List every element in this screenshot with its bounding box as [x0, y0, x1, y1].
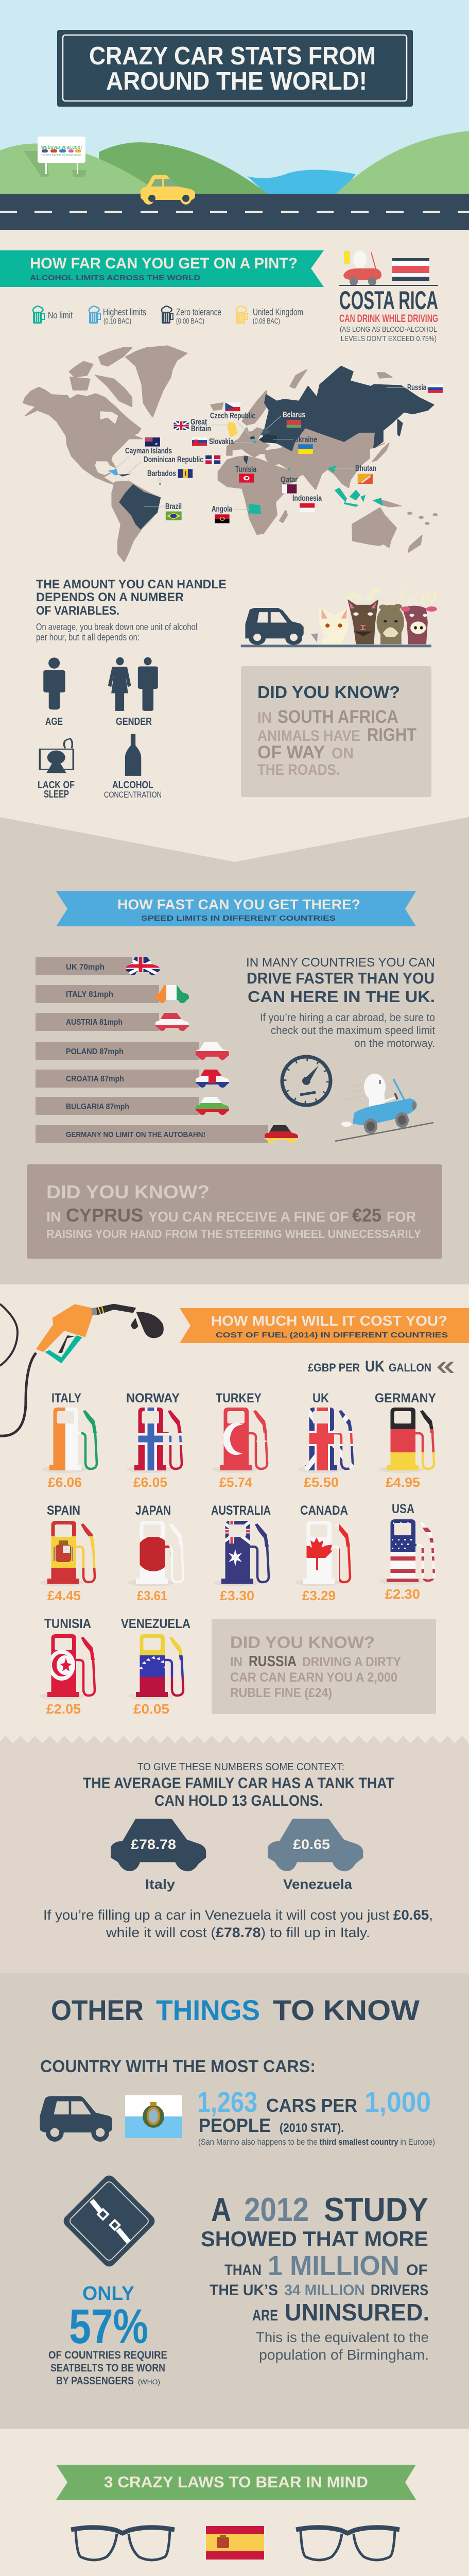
pump: Spain: £4.45 [47, 1588, 81, 1603]
car: Venezuela full tank price [268, 1819, 363, 1892]
legend: beer mugs [33, 306, 303, 326]
labels: variables: CONCENTRATION [104, 790, 162, 800]
did you know: Russia: DRIVING A DIRTY [302, 1655, 401, 1669]
background: sky [0, 0, 469, 196]
icon: dark car [40, 2096, 112, 2142]
did you know: Cyprus: CYPRUS [66, 1205, 143, 1226]
text: drive faster than you can in the UK: on the motorway. [354, 1038, 435, 1049]
pump: USA: £2.30 [385, 1586, 420, 1602]
title sign: AROUND THE WORLD! [106, 67, 367, 95]
speed bar: Austria: AUSTRIA 81mph [66, 1018, 123, 1027]
labels: variables: ALCOHOL [112, 779, 153, 791]
pump: Japan: JAPAN [135, 1503, 171, 1518]
map country labels: Ukraine [294, 435, 317, 444]
pump: Venezuela: £0.05 [133, 1701, 169, 1717]
text: drive faster than you can in the UK: IN MANY COUNTRIES YOU CAN [246, 956, 435, 970]
text: unit of alcohol per hour: On average, you break down one unit of alcohol [36, 622, 197, 632]
stat: 57 percent seatbelts: SEATBELTS TO BE WORN [50, 2362, 165, 2374]
heading: the amount you can handle [36, 578, 227, 618]
did you know: Cyprus: DID YOU KNOW? [46, 1181, 210, 1202]
pump: Turkey: £5.74 [219, 1475, 253, 1490]
stat: 57 percent seatbelts: (WHO) [138, 2378, 160, 2386]
text: drive faster than you can in the UK [246, 956, 435, 1049]
map country labels: Qatar [281, 476, 298, 484]
pump: Canada: CANADA [300, 1503, 348, 1518]
legend: beer mugs: (0.08 BAC) [253, 317, 280, 326]
callout: Costa Rica [339, 286, 438, 343]
speed bar: Croatia: CROATIA 87mph [66, 1075, 124, 1083]
stat: 2012 uninsured drivers study: A [211, 2191, 231, 2228]
map country labels: Angola [212, 505, 232, 514]
did you know: Russia [212, 1619, 436, 1714]
map country labels: Britain [191, 425, 211, 433]
icon: seatbelt sign [61, 2173, 157, 2269]
did you know: South Africa: DID YOU KNOW? [257, 683, 400, 702]
stat: 2012 uninsured drivers study: DRIVERS [371, 2282, 428, 2299]
pump: UK [298, 1391, 356, 1490]
illustration: driver in red car with beer [339, 250, 438, 286]
map country labels: Bhutan [355, 464, 376, 473]
heading: other things to know [51, 1994, 420, 2026]
stat: 2012 uninsured drivers study: 2012 [244, 2191, 309, 2228]
pump: Italy: £6.06 [48, 1475, 82, 1490]
labels: variables: GENDER [116, 716, 152, 727]
did you know: South Africa: IN [257, 709, 272, 726]
icon: yellow car on road [141, 175, 195, 205]
flag: San Marino [125, 2095, 182, 2138]
did you know: South Africa: THE ROADS. [257, 761, 340, 778]
pump: Australia: £3.30 [220, 1588, 254, 1603]
stat: 57 percent seatbelts: BY PASSENGERS [56, 2375, 134, 2387]
stat: 2012 uninsured drivers study: OF [406, 2262, 428, 2279]
did you know: Cyprus: FOR [387, 1209, 416, 1225]
heading: tank context: CAN HOLD 13 GALLONS. [154, 1792, 323, 1809]
text: filling up comparison [43, 1907, 433, 1940]
heading ribbon: 3 crazy laws [56, 2465, 416, 2500]
stat: 2012 uninsured drivers study: This is the equivalent to the [256, 2329, 429, 2345]
stat: cars per 1000 people: 1,000 [364, 2086, 431, 2118]
map country labels: Brazil [165, 502, 182, 511]
stat: 2012 uninsured drivers study: THAN [224, 2262, 262, 2279]
did you know: Cyprus [27, 1164, 442, 1259]
pump: Australia: AUSTRALIA [211, 1503, 271, 1518]
pump: Tunisia: TUNISIA [44, 1617, 91, 1631]
legend: beer mugs: (0.00 BAC) [176, 317, 204, 326]
pump: Norway: NORWAY [126, 1391, 180, 1405]
legend: beer mugs: Highest limits [103, 307, 146, 317]
background: tank context section with zigzag edge [0, 1736, 469, 1974]
heading: tank context [83, 1761, 394, 1809]
pump: Canada [295, 1503, 353, 1603]
landscape hills and water [0, 131, 469, 195]
did you know: Russia: DID YOU KNOW? [230, 1633, 375, 1652]
stat: cars per 1000 people: 1,263 [197, 2086, 257, 2118]
map country labels [125, 383, 426, 514]
background: fuel section [0, 1284, 469, 1748]
background: beige alcohol section [0, 230, 469, 863]
billboard: webuyanycar.com: The UK's favourite car buying service [41, 154, 82, 156]
heading: other things to know: THINGS [156, 1994, 260, 2026]
heading ribbon: how much will it cost [180, 1308, 469, 1343]
speed bar: UK [36, 957, 160, 976]
unit label: GBP per UK gallon: £GBP PER [308, 1361, 360, 1374]
heading: the amount you can handle: DEPENDS ON A NUMBER [36, 590, 184, 604]
heading: other things to know: OTHER [51, 1994, 144, 2026]
background: crazy laws section [0, 2429, 469, 2576]
speed bar: UK: UK 70mph [66, 963, 105, 972]
stat: 2012 uninsured drivers study: 34 MILLION [284, 2282, 365, 2299]
pump: Spain: SPAIN [47, 1503, 80, 1518]
callout: Costa Rica: (AS LONG AS BLOOD-ALCOHOL [340, 325, 437, 334]
labels: variables: AGE [45, 716, 63, 727]
pump: Turkey [212, 1391, 270, 1490]
speed bar: Bulgaria [36, 1097, 229, 1115]
icon: speedometer [277, 1052, 335, 1110]
did you know: Russia: CAR CAN EARN YOU A 2,000 [230, 1670, 397, 1685]
did you know: Russia: IN [230, 1655, 242, 1669]
heading ribbon: how much will it cost: COST OF FUEL (2014) IN DIFFERENT COUNTRIES [216, 1331, 448, 1340]
heading: tank context: THE AVERAGE FAMILY CAR HAS A TANK THAT [83, 1775, 394, 1792]
legend: beer mugs: No limit [48, 310, 73, 320]
stat: 57 percent seatbelts: OF COUNTRIES REQUIRE [48, 2349, 167, 2361]
text: drive faster than you can in the UK: If you’re hiring a car abroad, be sure to [260, 1012, 435, 1024]
pump: Italy: ITALY [51, 1391, 81, 1405]
stat: 57 percent seatbelts [48, 2283, 167, 2387]
did you know: Cyprus: €25 [352, 1205, 381, 1226]
billboard: webuyanycar.com [24, 137, 86, 177]
speed bar: Austria [36, 1013, 189, 1031]
stat: cars per 1000 people: PEOPLE [199, 2115, 271, 2136]
map country labels: Russia [407, 383, 426, 392]
stat: cars per 1000 people: CARS PER [266, 2095, 357, 2116]
stat: cars per 1000 people: (San Marino also happens to be the third smallest country in Europe) [198, 2137, 435, 2147]
did you know: Cyprus: RAISING YOUR HAND FROM THE STEERING WHEEL UNNECESSARILY [46, 1227, 421, 1241]
unit label: GBP per UK gallon: UK [365, 1357, 385, 1375]
labels: variables: SLEEP [44, 789, 69, 800]
heading banner: how far can you get on a pint: ALCOHOL LIMITS ACROSS THE WORLD [30, 274, 200, 282]
pump: Italy [42, 1391, 100, 1490]
did you know: South Africa: OF WAY [257, 742, 325, 762]
unit label: GBP per UK gallon [308, 1357, 454, 1375]
speed bar: Bulgaria: BULGARIA 87mph [66, 1103, 129, 1111]
legend: beer mugs: United Kingdom [253, 307, 303, 317]
heading banner: how far can you get on a pint: HOW FAR CAN YOU GET ON A PINT? [30, 255, 298, 272]
heading ribbon: how fast can you get there: HOW FAST CAN YOU GET THERE? [117, 896, 360, 912]
text: filling up comparison: while it will cost ( £78.78) to fill up in Italy. [106, 1925, 370, 1940]
heading: other things to know: TO KNOW [273, 1994, 420, 2026]
speed bar: Poland: POLAND 87mph [66, 1047, 124, 1056]
speed bar: Poland [36, 1042, 229, 1060]
stat: 2012 uninsured drivers study: STUDY [324, 2191, 428, 2228]
speed bar: Germany: GERMANY NO LIMIT ON THE AUTOBAHN! [66, 1130, 205, 1139]
map country labels: Slovakia [209, 437, 234, 446]
pump: Norway: £6.05 [133, 1475, 167, 1490]
heading banner: how far can you get on a pint [0, 250, 324, 287]
car: Italy full tank price: Italy [145, 1876, 176, 1892]
pump: Canada: £3.29 [302, 1588, 336, 1603]
stat: 2012 uninsured drivers study: SHOWED THAT MORE [201, 2227, 428, 2251]
did you know: South Africa [241, 666, 431, 797]
flag: Spain [206, 2526, 264, 2560]
title sign [57, 30, 413, 107]
map country labels: Dominican Republic [144, 455, 203, 464]
pump: Japan [128, 1503, 186, 1603]
stat: 57 percent seatbelts: 57% [69, 2299, 148, 2354]
labels: variables: LACK OF [38, 779, 75, 791]
map country labels: Barbados [147, 469, 176, 478]
car: Italy full tank price: £78.78 [131, 1837, 176, 1852]
illustration: driver in blue car on slope [335, 1074, 433, 1141]
legend: beer mugs: Zero tolerance [176, 307, 221, 317]
road [0, 194, 469, 230]
icon: glasses right [296, 2528, 399, 2560]
pump: Norway [126, 1391, 185, 1490]
map country labels: Indonesia [292, 494, 322, 503]
title sign: CRAZY CAR STATS FROM [89, 42, 376, 70]
text: unit of alcohol per hour: per hour, but it all depends on: [36, 632, 140, 642]
heading ribbon: how fast can you get there: SPEED LIMITS IN DIFFERENT COUNTRIES [141, 914, 336, 923]
stat: 2012 uninsured drivers study: population of Birmingham. [259, 2347, 429, 2363]
did you know: South Africa: ON [332, 745, 354, 762]
pump: Venezuela: VENEZUELA [121, 1617, 190, 1631]
map country labels: Great [190, 418, 207, 427]
callout: Costa Rica: LEVELS DON’T EXCEED 0.75%) [341, 334, 437, 343]
speed bar: Italy [36, 985, 189, 1004]
icon: fuel nozzle and hose [0, 1304, 164, 1436]
pump: Spain [40, 1503, 98, 1603]
legend: beer mugs: (0.10 BAC) [103, 317, 131, 326]
map flags [145, 384, 443, 523]
map country labels: Czech Republic [210, 412, 255, 420]
heading ribbon: how fast can you get there [56, 891, 416, 926]
speed bar: Italy: ITALY 81mph [66, 990, 113, 999]
heading ribbon: 3 crazy laws: 3 CRAZY LAWS TO BEAR IN MIND [104, 2473, 368, 2491]
unit label: GBP per UK gallon: GALLON [389, 1361, 431, 1374]
map country labels: Belarus [283, 411, 305, 419]
pump: Tunisia [40, 1617, 98, 1717]
pump: Australia [211, 1503, 272, 1603]
flag: Costa Rica [392, 258, 429, 281]
pump: Japan: £3.61 [137, 1588, 167, 1603]
text: filling up comparison: If you’re filling up a car in Venezuela it will cost you just £0.65, [43, 1907, 433, 1923]
world map of alcohol limits [23, 346, 437, 562]
did you know: South Africa: SOUTH AFRICA [277, 707, 398, 727]
heading: country with the most cars: COUNTRY WITH THE MOST CARS: [40, 2057, 316, 2076]
text: unit of alcohol per hour [36, 622, 197, 642]
illustration: car stopped for animals [241, 589, 437, 647]
icon: glasses left [71, 2528, 175, 2560]
billboard: webuyanycar.com: webuyanycar.com [41, 144, 82, 150]
did you know: Cyprus: YOU CAN RECEIVE A FINE OF [148, 1209, 349, 1225]
did you know: Russia: RUBLE FINE (£24) [230, 1686, 332, 1700]
car: Venezuela full tank price: Venezuela [283, 1876, 353, 1892]
speed bar: Croatia [36, 1070, 229, 1088]
text: drive faster than you can in the UK: CAN HERE IN THE UK. [248, 988, 435, 1006]
stat: 2012 uninsured drivers study [201, 2191, 429, 2363]
pump: UK: £5.50 [304, 1475, 339, 1490]
heading: the amount you can handle: OF VARIABLES. [36, 604, 119, 618]
speed bar: Germany [36, 1125, 298, 1144]
text: drive faster than you can in the UK: DRIVE FASTER THAN YOU [247, 969, 435, 987]
pump: Venezuela [121, 1617, 190, 1717]
map country labels: Cayman Islands [125, 447, 172, 455]
pump: Germany: GERMANY [375, 1391, 436, 1405]
pump: Turkey: TURKEY [216, 1391, 262, 1405]
pump: USA [379, 1502, 437, 1602]
car: Italy full tank price [111, 1819, 206, 1892]
labels: variables [38, 716, 162, 800]
heading ribbon: how much will it cost: HOW MUCH WILL IT COST YOU? [211, 1313, 447, 1329]
stat: 2012 uninsured drivers study: THE UK’S [210, 2282, 278, 2299]
text: drive faster than you can in the UK: check out the maximum speed limit [271, 1025, 435, 1037]
stat: cars per 1000 people: (2010 STAT). [280, 2121, 344, 2135]
heading: the amount you can handle: THE AMOUNT YOU CAN HANDLE [36, 578, 227, 591]
stat: cars per 1000 people [197, 2086, 435, 2147]
icon: age, gender, sleep, bottle figures [40, 657, 158, 776]
stat: 57 percent seatbelts: ONLY [82, 2283, 134, 2304]
stat: 2012 uninsured drivers study: UNINSURED. [285, 2299, 429, 2326]
stat: 2012 uninsured drivers study: 1 MILLION [268, 2250, 399, 2281]
pump: Germany: £4.95 [386, 1475, 420, 1490]
background: speed section with chevron [0, 817, 469, 1284]
did you know: South Africa: ANIMALS HAVE [257, 727, 360, 744]
pump: Tunisia: £2.05 [46, 1701, 81, 1717]
heading: tank context: TO GIVE THESE NUMBERS SOME CONTEXT: [137, 1761, 344, 1773]
did you know: South Africa: RIGHT [367, 725, 416, 745]
pump: UK: UK [312, 1391, 329, 1405]
background: other things section [0, 1973, 469, 2429]
pump: USA: USA [392, 1502, 414, 1516]
map country labels: Tunisia [235, 465, 256, 474]
pump: Germany [375, 1391, 437, 1490]
did you know: Russia: RUSSIA [249, 1653, 297, 1670]
stat: 2012 uninsured drivers study: ARE [252, 2307, 278, 2324]
car: Venezuela full tank price: £0.65 [293, 1837, 330, 1852]
did you know: Cyprus: IN [46, 1209, 61, 1225]
